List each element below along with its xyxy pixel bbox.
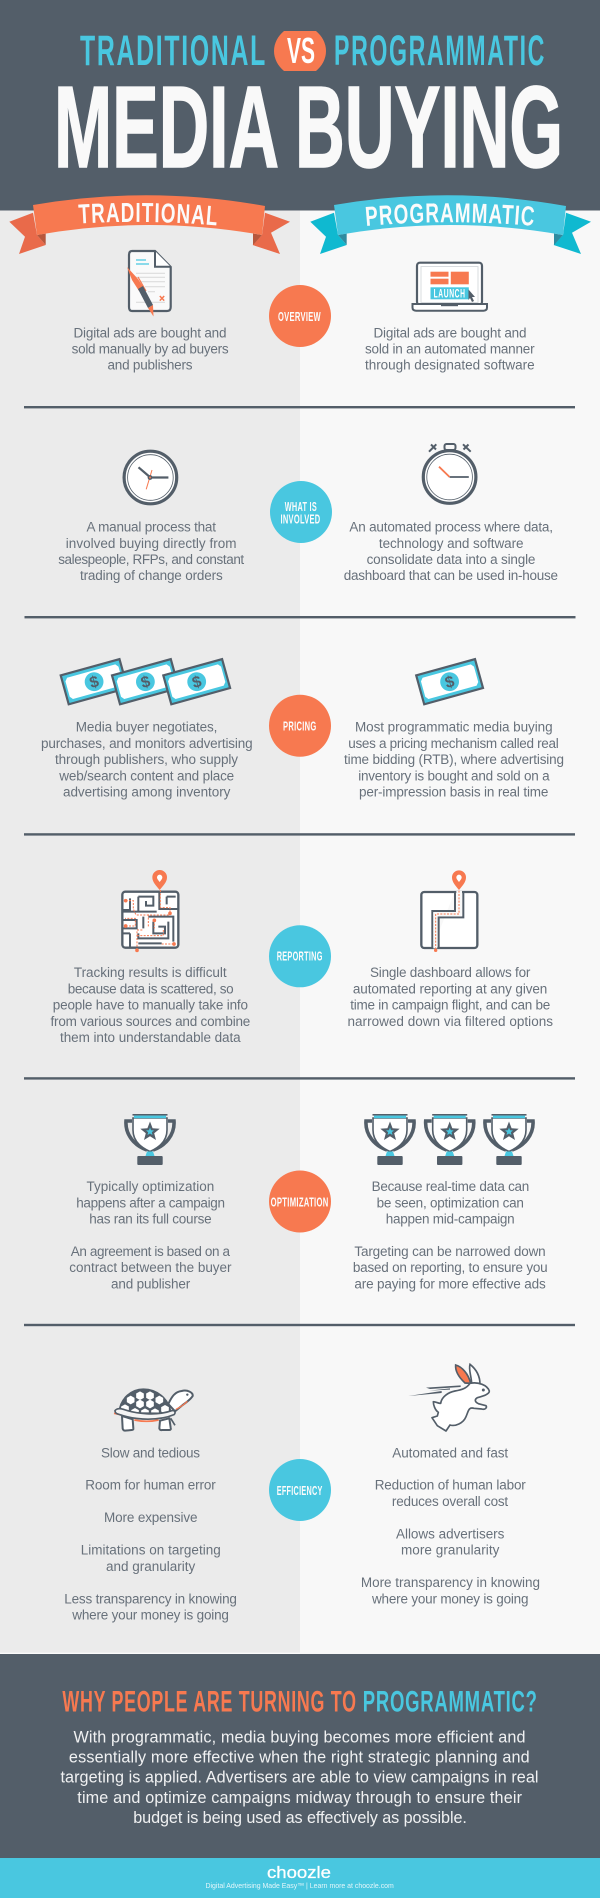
badge: vs: VS — [287, 30, 315, 71]
badge: what is involved — [270, 481, 332, 543]
badge: what is involved: WHAT IS — [285, 499, 317, 514]
text: overview programmatic: sold in an automated manner — [365, 342, 535, 356]
text: overview programmatic: through designated software — [365, 358, 535, 373]
text: involved programmatic — [344, 520, 558, 583]
panel: optimization — [69, 1114, 548, 1291]
text: pricing traditional: web/search content and place — [58, 768, 234, 783]
icon: stopwatch — [423, 444, 476, 503]
text: closing paragraph: budget is being used as effectively as possible. — [133, 1809, 467, 1827]
divider — [24, 833, 575, 836]
panel: programmatic column background — [300, 210, 600, 1654]
text: reporting traditional: from various sources and combine — [50, 1014, 250, 1029]
icon: three banknotes: $ — [88, 673, 101, 692]
icon: one banknote — [416, 659, 483, 704]
text: optimization traditional: has ran its full course — [89, 1212, 212, 1227]
text: pricing traditional: advertising among inventory — [63, 785, 231, 800]
badge: pricing: PRICING — [283, 718, 316, 733]
text: reporting traditional: Tracking results is difficult — [74, 965, 227, 980]
ribbon: programmatic — [310, 195, 591, 254]
text: efficiency traditional: and granularity — [106, 1559, 195, 1574]
text: reporting traditional: because data is scattered, so — [68, 981, 234, 996]
text: involved traditional: salespeople, RFPs, and constant — [58, 552, 244, 567]
text: efficiency programmatic: more granularity — [401, 1543, 500, 1558]
text: reporting traditional: them into understandable data — [60, 1030, 241, 1045]
text: involved traditional: involved buying directly from — [66, 536, 236, 551]
icon: contract and pen — [127, 251, 171, 316]
text: efficiency programmatic: Reduction of human labor — [375, 1478, 526, 1493]
text: closing paragraph — [60, 1728, 538, 1827]
text: reporting traditional: people have to manually take info — [53, 998, 248, 1013]
text: optimization programmatic: based on reporting, to ensure you — [353, 1260, 548, 1275]
text: efficiency traditional: Less transparency in knowing — [64, 1591, 237, 1606]
text: overview programmatic — [365, 325, 535, 373]
heading: why people are turning to programmatic: WHY PEOPLE ARE TURNING TO — [62, 1686, 357, 1719]
text: efficiency traditional: Room for human error — [85, 1478, 216, 1493]
footer — [0, 1858, 600, 1898]
text: efficiency traditional: where your money is going — [71, 1608, 229, 1623]
text: closing paragraph: With programmatic, media buying becomes more efficient and — [74, 1728, 526, 1746]
text: overview programmatic: Digital ads are bought and — [374, 325, 526, 340]
icon: laptop launch: LAUNCH — [434, 289, 466, 301]
text: optimization programmatic: Because real-time data can — [372, 1179, 529, 1194]
icon: three trophies — [366, 1114, 533, 1165]
text: optimization programmatic: Targeting can be narrowed down — [354, 1244, 546, 1259]
badge: optimization: OPTIMIZATION — [271, 1194, 329, 1210]
text: pricing traditional: Media buyer negotiates, — [76, 720, 217, 735]
badge: what is involved: INVOLVED — [280, 511, 320, 526]
text: pricing programmatic: per-impression basis in real time — [359, 785, 548, 800]
text: pricing programmatic: uses a pricing mechanism called real — [348, 736, 559, 751]
badge: overview — [269, 285, 331, 347]
badge: overview: OVERVIEW — [278, 309, 321, 324]
text: efficiency traditional: Slow and tedious — [101, 1445, 200, 1460]
divider — [24, 1077, 575, 1080]
ribbon: programmatic: PROGRAMMATIC — [366, 203, 534, 226]
text: optimization programmatic: are paying for more effective ads — [354, 1276, 546, 1291]
text: overview traditional: sold manually by ad buyers — [72, 342, 229, 356]
text: pricing traditional — [41, 720, 253, 800]
logo: choozle: choozle — [267, 1863, 331, 1882]
badge: reporting — [269, 925, 331, 987]
text: closing paragraph: targeting is applied. Advertisers are able to view campaigns in real — [60, 1769, 538, 1787]
panel: overview — [72, 251, 535, 373]
badge: vs — [274, 30, 326, 71]
text: efficiency programmatic: Automated and fast — [392, 1445, 508, 1460]
text: optimization traditional: and publisher — [111, 1276, 191, 1291]
title: media buying: MEDIA — [54, 62, 279, 192]
text: overview traditional — [72, 325, 229, 373]
text: pricing traditional: purchases, and monitors advertising — [41, 736, 253, 751]
text: reporting programmatic: Single dashboard allows for — [370, 965, 531, 980]
icon: maze with pin — [122, 870, 178, 952]
text: optimization traditional: An agreement is based on a — [71, 1244, 230, 1259]
text: pricing programmatic — [344, 720, 564, 800]
badge: pricing — [269, 695, 331, 757]
icon: three banknotes: $ — [139, 673, 152, 692]
text: reporting traditional — [50, 965, 250, 1045]
text: reporting programmatic: narrowed down via filtered options — [348, 1014, 553, 1029]
icon: one trophy — [126, 1114, 174, 1165]
text: involved traditional: trading of change orders — [80, 568, 223, 583]
text: optimization programmatic: happen mid-campaign — [386, 1212, 515, 1227]
text: pricing programmatic: inventory is bought and sold on a — [358, 768, 550, 783]
icon: laptop launch — [412, 263, 487, 311]
panel: efficiency — [64, 1364, 540, 1623]
text: efficiency traditional: More expensive — [104, 1510, 198, 1525]
badge: efficiency: EFFICIENCY — [277, 1483, 323, 1498]
icon: simple path with pin — [421, 870, 477, 952]
text: efficiency programmatic: More transparency in knowing — [361, 1575, 540, 1590]
icon: three banknotes: $ — [190, 673, 204, 692]
text: involved programmatic: technology and software — [379, 536, 524, 551]
divider — [24, 406, 575, 408]
text: overview traditional: Digital ads are bought and — [74, 325, 226, 340]
title: traditional: TRADITIONAL — [80, 27, 267, 75]
text: reporting programmatic — [348, 965, 553, 1029]
text: efficiency programmatic — [361, 1445, 540, 1606]
divider — [24, 1324, 575, 1326]
text: closing paragraph: essentially more effective when the right strategic planning and — [69, 1748, 530, 1766]
text: efficiency traditional — [64, 1445, 237, 1623]
text: closing paragraph: time and optimize campaigns midway through to ensure their — [77, 1789, 523, 1807]
text: efficiency programmatic: where your money is going — [371, 1591, 528, 1606]
text: involved programmatic: An automated process where data, — [349, 520, 553, 535]
badge: efficiency — [269, 1459, 331, 1521]
text: involved programmatic: dashboard that can be used in-house — [344, 568, 558, 583]
icon: clock — [124, 451, 177, 504]
icon: turtle — [114, 1389, 193, 1431]
text: involved traditional: A manual process that — [86, 520, 216, 535]
badge: optimization — [269, 1170, 331, 1232]
text: pricing traditional: through publishers, who supply — [55, 752, 238, 767]
text: pricing programmatic: time bidding (RTB), where advertising — [344, 752, 564, 767]
panel: what is involved — [58, 444, 558, 583]
text: efficiency traditional: Limitations on targeting — [81, 1543, 221, 1558]
panel: reporting — [50, 870, 553, 1045]
text: pricing programmatic: Most programmatic media buying — [355, 720, 553, 735]
text: optimization programmatic — [353, 1179, 548, 1291]
text: reporting programmatic: automated reporting at any given — [353, 981, 547, 996]
panel: why people are turning to programmatic — [0, 1653, 600, 1858]
text: involved traditional — [58, 520, 244, 583]
text: reporting programmatic: time in campaign flight, and can be — [350, 998, 550, 1013]
text: efficiency programmatic: reduces overall cost — [392, 1494, 508, 1509]
text: involved programmatic: consolidate data into a single — [367, 552, 535, 567]
icon: three banknotes — [61, 659, 230, 704]
text: optimization traditional: contract between the buyer — [69, 1260, 232, 1275]
header panel — [0, 0, 600, 210]
badge: reporting: REPORTING — [277, 949, 323, 964]
text: efficiency programmatic: Allows advertisers — [396, 1526, 505, 1541]
icon: one banknote: $ — [443, 673, 457, 692]
ribbon: traditional: TRADITIONAL — [78, 203, 216, 226]
icon: rabbit — [408, 1364, 489, 1431]
text: tagline: Digital Advertising Made Easy™ | Learn more at choozle.com — [206, 1881, 394, 1890]
text: overview traditional: and publishers — [108, 358, 193, 373]
divider — [24, 616, 576, 618]
ribbon: traditional — [9, 195, 290, 254]
text: optimization traditional: Typically optimization — [86, 1179, 214, 1194]
text: optimization programmatic: be seen, optimization can — [377, 1195, 524, 1210]
text: optimization traditional — [69, 1179, 232, 1291]
panel: pricing — [41, 659, 564, 800]
text: optimization traditional: happens after a campaign — [76, 1195, 225, 1210]
panel: traditional column background — [0, 210, 300, 1653]
